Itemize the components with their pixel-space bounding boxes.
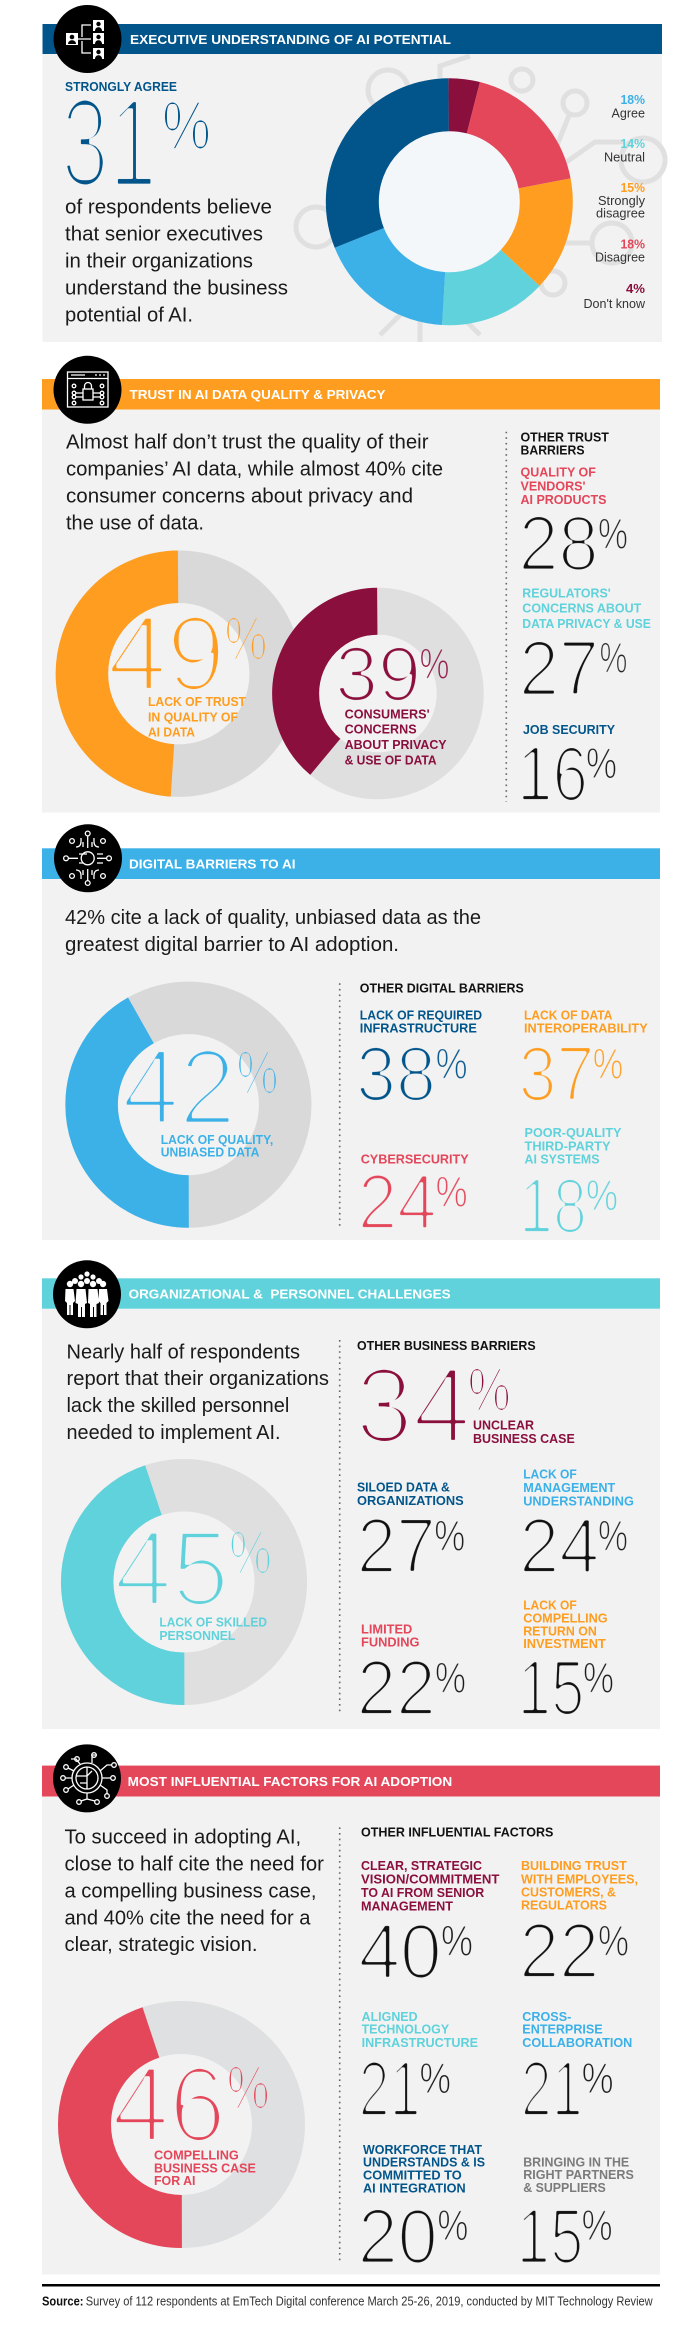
header bar xyxy=(42,1766,660,1796)
label: POOR-QUALITY xyxy=(524,1125,622,1140)
stat 21%: % xyxy=(582,2054,614,2103)
body text: consumer concerns about privacy and xyxy=(66,485,413,507)
label: & USE OF DATA xyxy=(345,752,437,767)
stat 24%: % xyxy=(598,1512,628,1561)
panel: digital barriers xyxy=(42,824,660,1249)
stat 34%: % xyxy=(468,1356,511,1424)
label xyxy=(523,1467,634,1508)
donut: 49% xyxy=(82,577,276,771)
stat 27%: 27 xyxy=(357,1502,436,1590)
header bar xyxy=(42,24,662,54)
label: RETURN ON xyxy=(523,1623,597,1638)
label: TECHNOLOGY xyxy=(362,2022,449,2037)
label: ABOUT PRIVACY xyxy=(345,737,447,752)
donut: 39% xyxy=(296,611,460,776)
body text xyxy=(66,431,443,534)
section title: ORGANIZATIONAL & PERSONNEL CHALLENGES xyxy=(129,1286,451,1301)
stat 42%: % xyxy=(236,1038,278,1106)
body text: needed to implement AI. xyxy=(66,1422,280,1444)
body text: To succeed in adopting AI, xyxy=(64,1827,301,1849)
label: ALIGNED xyxy=(362,2009,418,2024)
stat 22%: % xyxy=(435,1653,466,1702)
panel: organizational challenges xyxy=(42,1260,660,1731)
label: COMMITTED TO xyxy=(363,2168,462,2182)
stat 21%: % xyxy=(420,2054,451,2103)
label: INFRASTRUCTURE xyxy=(362,2035,478,2050)
body text: a compelling business case, xyxy=(64,1881,316,1903)
label: ENTERPRISE xyxy=(522,2022,603,2037)
stat 42%: 42 xyxy=(122,1026,236,1147)
legend: 14% xyxy=(620,136,645,151)
label: LACK OF TRUST xyxy=(148,694,246,709)
label: LIMITED xyxy=(361,1622,412,1637)
stat 24%: % xyxy=(436,1168,468,1217)
body text: potential of AI. xyxy=(65,304,193,326)
section title: TRUST IN AI DATA QUALITY & PRIVACY xyxy=(130,387,386,402)
stat 37%: 37 xyxy=(518,1030,594,1118)
header bar xyxy=(42,1278,660,1309)
stat 46%: % xyxy=(227,2054,270,2122)
stat 21%: 21 xyxy=(359,2044,421,2132)
stat 45%: % xyxy=(229,1518,272,1586)
stat 49%: 49 xyxy=(108,593,226,714)
label: UNDERSTANDING xyxy=(523,1493,634,1508)
label: UNDERSTANDS & IS xyxy=(363,2155,485,2170)
legend: 4% xyxy=(626,281,645,296)
body text: the use of data. xyxy=(66,512,204,534)
label: REGULATORS xyxy=(521,1898,607,1913)
label: IN QUALITY OF xyxy=(148,709,238,724)
stat 28%: 28 xyxy=(518,499,598,587)
label: BUILDING TRUST xyxy=(521,1858,627,1873)
body text: clear, strategic vision. xyxy=(64,1934,258,1956)
label: ORGANIZATIONS xyxy=(357,1493,464,1508)
label xyxy=(345,706,447,767)
stat 18%: 18 xyxy=(519,1161,587,1249)
label xyxy=(523,1597,608,1651)
label xyxy=(159,1615,267,1643)
legend: disagree xyxy=(596,206,645,220)
stat 18%: % xyxy=(586,1171,618,1220)
label: MANAGEMENT xyxy=(361,1898,453,1913)
stat 27%: % xyxy=(600,634,628,683)
body text: lack the skilled personnel xyxy=(66,1395,289,1417)
label: CONCERNS xyxy=(345,722,417,737)
label: AI SYSTEMS xyxy=(524,1152,600,1167)
network watermark xyxy=(296,56,665,342)
heading: other trust barriers: OTHER TRUST xyxy=(520,429,609,444)
heading: OTHER BUSINESS BARRIERS xyxy=(357,1338,536,1353)
icon: people xyxy=(53,1260,121,1328)
label: UNCLEAR xyxy=(473,1418,535,1433)
label: LACK OF xyxy=(523,1597,577,1612)
label: BRINGING IN THE xyxy=(523,2154,630,2169)
label xyxy=(521,1858,638,1913)
legend xyxy=(584,92,646,311)
body text: in their organizations xyxy=(65,250,253,272)
body text: of respondents believe xyxy=(65,196,272,218)
label: REGULATORS' xyxy=(522,585,611,600)
heading: OTHER DIGITAL BARRIERS xyxy=(360,981,524,996)
label: UNBIASED DATA xyxy=(161,1145,260,1160)
label: INTEROPERABILITY xyxy=(524,1021,648,1036)
stat 24%: 24 xyxy=(519,1502,599,1590)
label: & SUPPLIERS xyxy=(523,2180,606,2195)
big stat 31%: 31 xyxy=(61,74,157,213)
label: BUSINESS CASE xyxy=(473,1431,575,1446)
kicker: STRONGLY AGREE xyxy=(65,79,177,94)
stat 16%: 16 xyxy=(517,730,588,818)
header bar xyxy=(42,379,660,410)
label xyxy=(524,1007,648,1036)
body text xyxy=(65,196,288,326)
stat 46%: 46 xyxy=(112,2043,226,2164)
label: LACK OF SKILLED xyxy=(159,1615,267,1630)
stat 38%: 38 xyxy=(356,1030,436,1118)
label xyxy=(154,2148,256,2188)
body text: report that their organizations xyxy=(66,1368,329,1390)
stat 45%: 45 xyxy=(114,1507,229,1628)
label: VENDORS' xyxy=(520,478,586,493)
legend: 18% xyxy=(620,92,645,107)
label xyxy=(361,1858,499,1913)
label: INFRASTRUCTURE xyxy=(360,1021,477,1036)
label: CYBERSECURITY xyxy=(361,1151,469,1166)
label: DATA PRIVACY & USE xyxy=(522,616,651,631)
body text: understand the business xyxy=(65,278,288,300)
label xyxy=(473,1418,575,1446)
label: RIGHT PARTNERS xyxy=(523,2167,634,2182)
section title: EXECUTIVE UNDERSTANDING OF AI POTENTIAL xyxy=(130,32,451,47)
label: CUSTOMERS, & xyxy=(521,1884,616,1899)
section title: MOST INFLUENTIAL FACTORS FOR AI ADOPTION xyxy=(128,1774,452,1789)
label xyxy=(522,585,651,631)
panel: executive understanding xyxy=(42,5,665,342)
label: LACK OF xyxy=(523,1467,577,1482)
stat 16%: % xyxy=(586,739,617,788)
label xyxy=(148,694,246,740)
legend: 15% xyxy=(620,180,645,195)
heading: other trust barriers: BARRIERS xyxy=(520,443,585,458)
label xyxy=(357,1480,464,1508)
stat 20%: 20 xyxy=(358,2192,438,2280)
label: FUNDING xyxy=(361,1635,420,1650)
panel: most influential factors xyxy=(42,1744,660,2280)
body text: Almost half don’t trust the quality of their xyxy=(66,431,429,453)
stat 37%: % xyxy=(593,1039,623,1088)
body text xyxy=(66,1341,329,1444)
label xyxy=(523,2154,634,2195)
label xyxy=(520,465,607,507)
label: WORKFORCE THAT xyxy=(363,2142,482,2157)
legend: Agree xyxy=(612,106,645,120)
label: SILOED DATA & xyxy=(357,1480,450,1495)
body text: and 40% cite the need for a xyxy=(64,1907,311,1929)
body text: 42% cite a lack of quality, unbiased data as the xyxy=(65,907,481,929)
stat 15%: 15 xyxy=(516,2192,584,2280)
label: LACK OF QUALITY, xyxy=(161,1132,273,1147)
donut: 45% xyxy=(87,1485,281,1679)
label: AI INTEGRATION xyxy=(363,2180,466,2195)
label: THIRD-PARTY xyxy=(524,1138,611,1153)
stat 49%: % xyxy=(224,604,268,672)
label: CROSS- xyxy=(522,2009,571,2024)
label: VISION/COMMITMENT xyxy=(361,1872,499,1887)
icon: browser lock xyxy=(54,356,122,424)
legend: Don't know xyxy=(584,296,646,311)
label: BUSINESS CASE xyxy=(154,2160,256,2175)
label: AI PRODUCTS xyxy=(520,492,607,507)
label: WITH EMPLOYEES, xyxy=(521,1872,638,1887)
stat 39%: % xyxy=(420,639,450,688)
stat 22%: % xyxy=(598,1917,629,1966)
label: CONSUMERS' xyxy=(345,706,430,721)
label xyxy=(522,2009,632,2050)
panel: trust in AI data xyxy=(42,356,660,818)
stat 22%: 22 xyxy=(357,1643,436,1731)
header bar xyxy=(42,848,660,879)
stat 22%: 22 xyxy=(519,1906,599,1994)
body text xyxy=(64,1827,324,1956)
donut: 46% xyxy=(84,2028,278,2222)
source note: Source: xyxy=(42,2293,84,2308)
stat 20%: % xyxy=(437,2201,468,2250)
label: CONCERNS ABOUT xyxy=(522,601,641,616)
label: CLEAR, STRATEGIC xyxy=(361,1858,483,1873)
body text: greatest digital barrier to AI adoption. xyxy=(65,934,399,956)
body text: Nearly half of respondents xyxy=(66,1341,300,1363)
legend: Disagree xyxy=(595,250,645,265)
legend: 18% xyxy=(620,237,645,252)
stat 15%: % xyxy=(583,1653,614,1702)
label xyxy=(360,1007,482,1036)
donut: 42% xyxy=(92,1008,285,1202)
label xyxy=(363,2142,485,2195)
label: QUALITY OF xyxy=(520,465,596,480)
label xyxy=(524,1125,622,1167)
label: COMPELLING xyxy=(154,2148,239,2162)
label: AI DATA xyxy=(148,725,196,740)
label: PERSONNEL xyxy=(159,1628,235,1643)
label: LACK OF REQUIRED xyxy=(360,1007,482,1022)
label: LACK OF DATA xyxy=(524,1007,613,1022)
stat 40%: % xyxy=(441,1917,473,1966)
stat 27%: % xyxy=(434,1512,465,1561)
label xyxy=(361,1622,420,1650)
body text: close to half cite the need for xyxy=(64,1853,324,1875)
heading: OTHER INFLUENTIAL FACTORS xyxy=(361,1824,554,1840)
stat 28%: % xyxy=(598,509,628,558)
icon: circuit hub xyxy=(54,824,122,892)
label: FOR AI xyxy=(154,2173,196,2188)
label: MANAGEMENT xyxy=(523,1480,615,1495)
label: COMPELLING xyxy=(523,1610,608,1625)
label xyxy=(362,2009,478,2050)
stat 39%: 39 xyxy=(335,630,421,718)
body text: that senior executives xyxy=(65,224,263,246)
stat 27%: 27 xyxy=(519,624,599,712)
body text xyxy=(65,907,481,956)
label: JOB SECURITY xyxy=(523,722,615,737)
label xyxy=(161,1132,273,1160)
body text: companies’ AI data, while almost 40% cite xyxy=(66,458,443,480)
source rule xyxy=(42,2284,660,2286)
legend: Strongly xyxy=(598,193,645,208)
icon: org chart xyxy=(54,5,122,73)
stat 15%: 15 xyxy=(518,1643,584,1731)
stat 40%: 40 xyxy=(359,1907,442,1995)
stat 34%: 34 xyxy=(355,1345,470,1466)
stat 21%: 21 xyxy=(521,2044,583,2132)
label: COLLABORATION xyxy=(522,2035,632,2050)
label: INVESTMENT xyxy=(523,1636,606,1651)
section title: DIGITAL BARRIERS TO AI xyxy=(129,857,296,872)
heading: other trust barriers xyxy=(520,429,609,458)
stat 15%: % xyxy=(582,2201,613,2250)
big stat 31%: % xyxy=(162,87,211,164)
icon: neural sphere xyxy=(53,1744,121,1812)
stat 38%: % xyxy=(436,1039,468,1088)
donut chart xyxy=(352,105,546,299)
label: TO AI FROM SENIOR xyxy=(361,1885,485,1900)
stat 24%: 24 xyxy=(358,1157,437,1245)
legend: Neutral xyxy=(604,150,645,165)
